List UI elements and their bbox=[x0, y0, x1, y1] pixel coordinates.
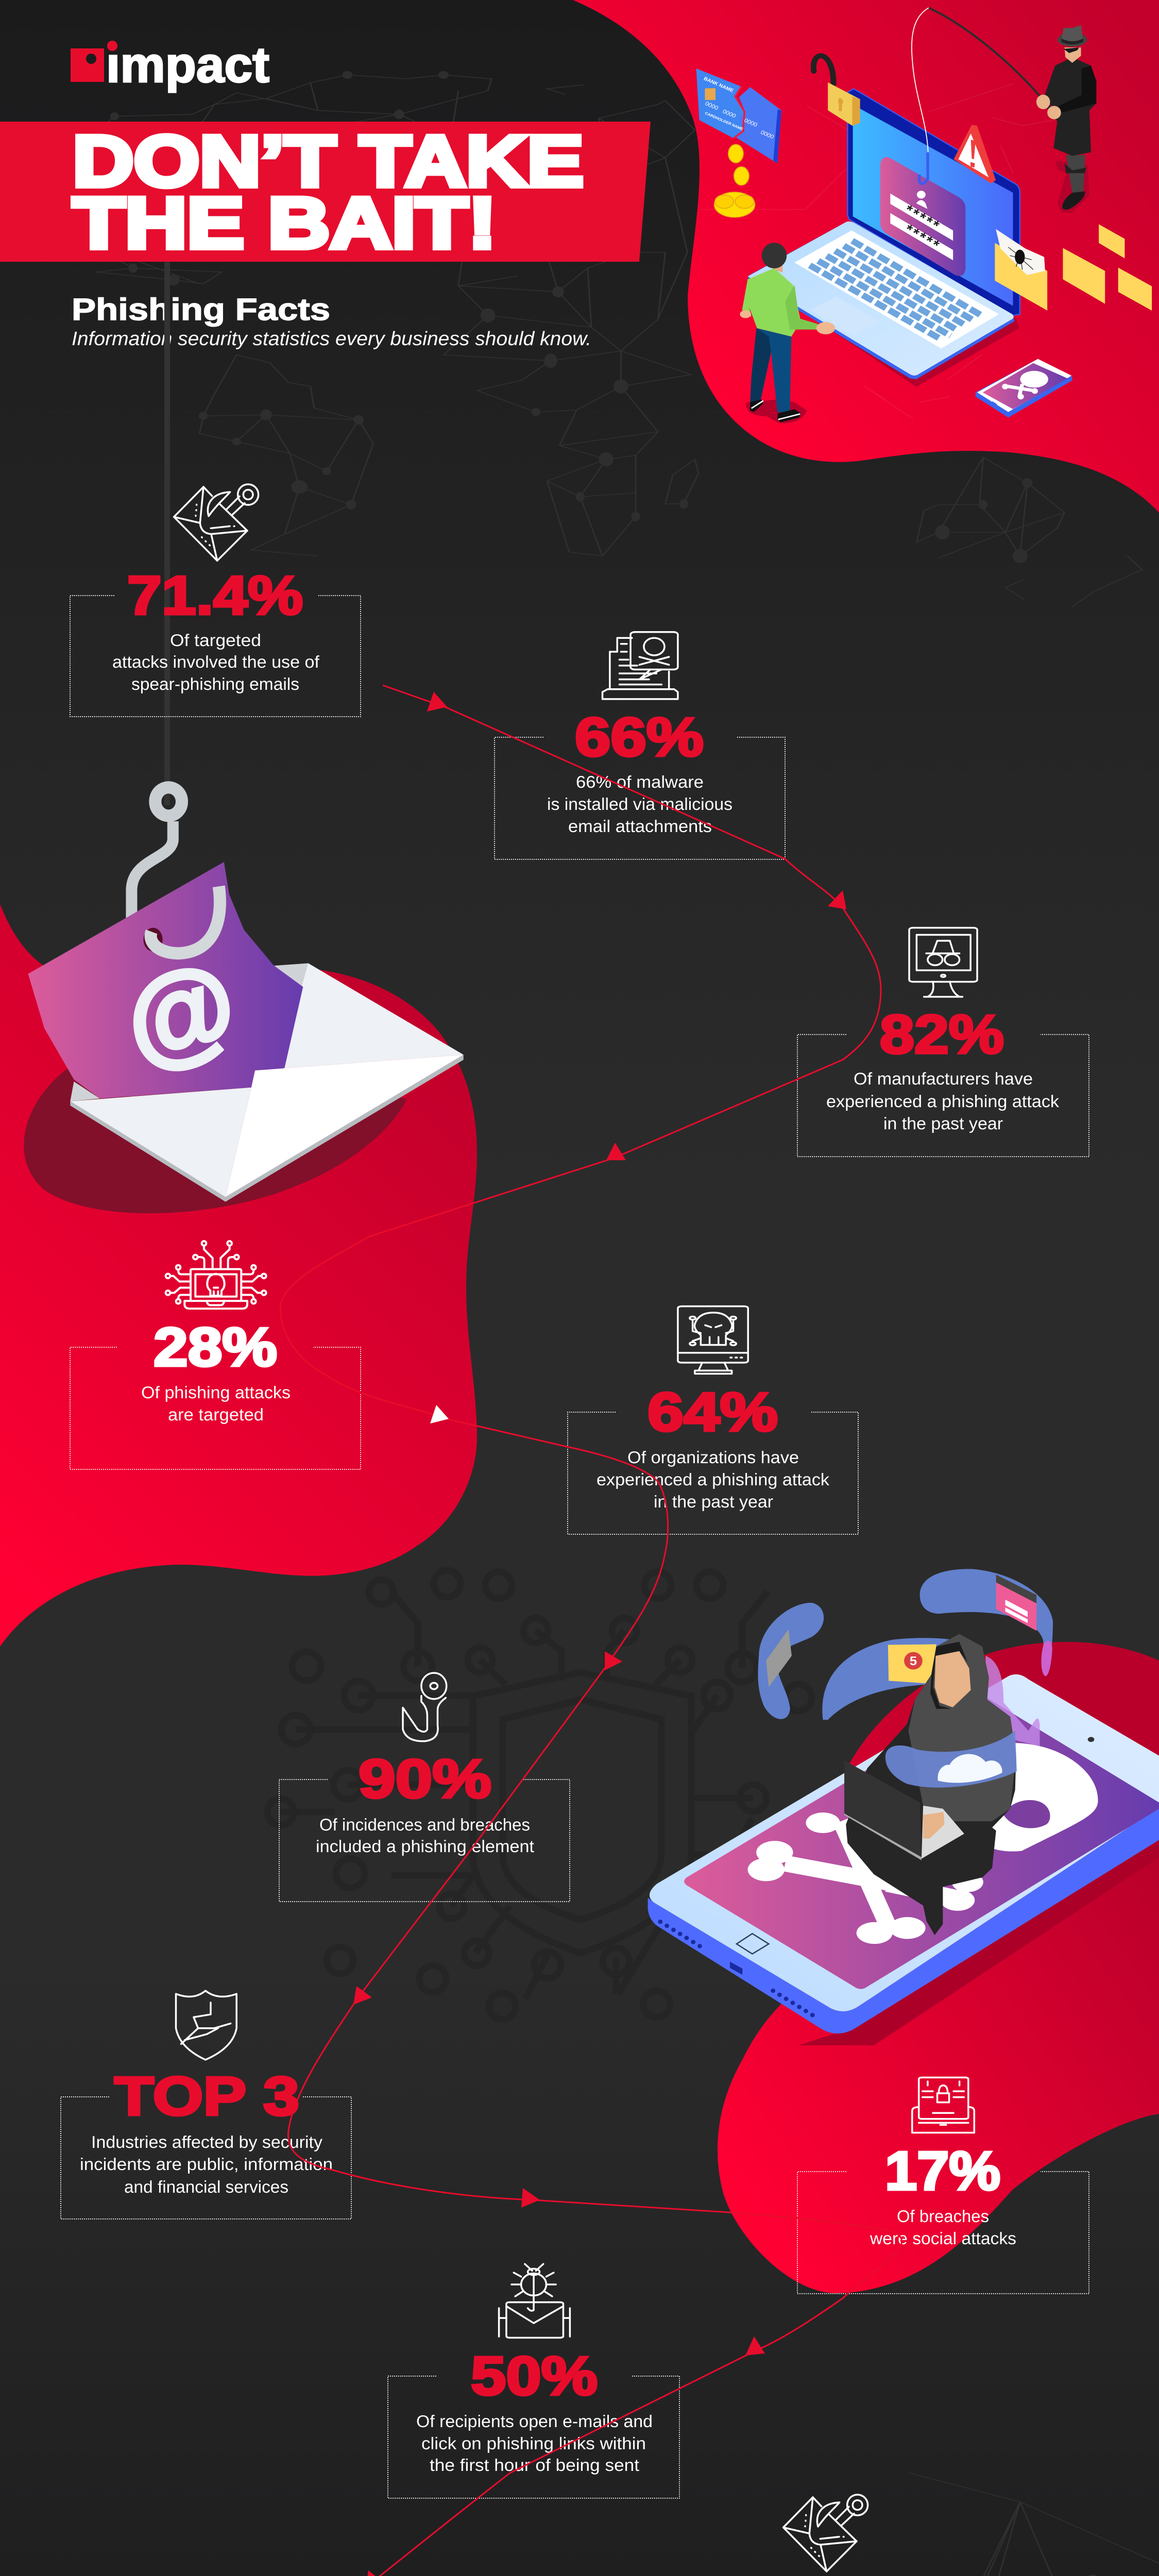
dotted box bbox=[388, 2376, 679, 2498]
description: email attachments bbox=[568, 817, 712, 836]
laptop shadow bbox=[800, 310, 1019, 387]
number: 71.4% bbox=[127, 565, 303, 626]
icon: hooked envelope bbox=[174, 484, 259, 561]
laptop bbox=[844, 1806, 964, 1859]
network pattern: bottom bbox=[301, 2473, 1159, 2576]
description: Industries affected by security bbox=[91, 2132, 323, 2151]
description: Of targeted bbox=[170, 631, 261, 650]
title banner: DON’T TAKE bbox=[73, 121, 584, 201]
man in green bbox=[746, 399, 807, 423]
panel: 28% stat bbox=[70, 1241, 361, 1469]
number: TOP 3 bbox=[114, 2066, 299, 2127]
lock bbox=[813, 56, 833, 84]
illustration: laptop phishing scene: ***** bbox=[901, 202, 944, 234]
description: Of recipients open e-mails and bbox=[416, 2412, 653, 2431]
icon: tablet lock bbox=[912, 2077, 974, 2133]
dotted box bbox=[70, 596, 361, 717]
envelope shadow bbox=[24, 1052, 406, 1213]
description bbox=[141, 1383, 291, 1424]
dotted box bbox=[70, 1347, 361, 1469]
panel: 50% stat bbox=[388, 2264, 679, 2498]
dotted box bbox=[797, 2172, 1089, 2294]
description: are targeted bbox=[168, 1405, 264, 1424]
description: Of phishing attacks bbox=[141, 1383, 291, 1402]
band with cloud bbox=[885, 1731, 1017, 1788]
panel: 17% stat bbox=[797, 2077, 1089, 2294]
keyboard bbox=[794, 230, 999, 349]
number: 17% bbox=[885, 2141, 1000, 2201]
description: were social attacks bbox=[870, 2229, 1016, 2248]
phone with skull bbox=[976, 359, 1072, 417]
description: included a phishing element bbox=[316, 1837, 534, 1856]
trackpad bbox=[810, 297, 880, 336]
number: 82% bbox=[880, 1004, 1004, 1065]
dotted box bbox=[495, 737, 785, 859]
connector arrow line bbox=[281, 685, 902, 2576]
description: incidents are public, information bbox=[80, 2155, 333, 2174]
number: 64% bbox=[647, 1382, 778, 1443]
description: spear-phishing emails bbox=[131, 674, 299, 693]
description bbox=[870, 2207, 1016, 2248]
illustration: laptop phishing scene: 0000 bbox=[721, 108, 737, 119]
description bbox=[112, 631, 320, 693]
hook ring and shank bbox=[155, 787, 182, 816]
illustration: laptop phishing scene: BANK NAME bbox=[703, 76, 735, 93]
subtitle block: Information security statistics every business should know. bbox=[72, 328, 591, 350]
description: experienced a phishing attack bbox=[826, 1092, 1060, 1111]
description: experienced a phishing attack bbox=[596, 1470, 830, 1489]
icon: bug on envelope bbox=[499, 2264, 570, 2337]
dotted box bbox=[61, 2097, 351, 2219]
at sign: @ bbox=[113, 939, 248, 1086]
envelope front bbox=[70, 1055, 464, 1202]
icon: broken shield bbox=[176, 1991, 236, 2060]
red blob: middle left bbox=[0, 904, 477, 1647]
arrowheads bbox=[353, 692, 846, 2576]
number: 28% bbox=[154, 1317, 277, 1378]
illustration: laptop phishing scene: CARDHOLDER NAME bbox=[704, 111, 744, 131]
description: and financial services bbox=[124, 2177, 288, 2196]
hacker bbox=[1056, 161, 1089, 213]
laptop base bbox=[747, 222, 1015, 379]
description: in the past year bbox=[654, 1492, 773, 1511]
illustration: hacker on phone: 5 bbox=[910, 1654, 917, 1668]
blue bubbles bbox=[758, 1603, 824, 1719]
description bbox=[826, 1069, 1060, 1133]
illustration: laptop phishing scene: 0000 bbox=[743, 117, 758, 128]
panel: 90% stat bbox=[279, 1673, 570, 1902]
dotted box bbox=[568, 1412, 858, 1534]
number: 90% bbox=[359, 1749, 491, 1809]
icon: spy monitor bbox=[909, 928, 977, 997]
yellow envelopes bbox=[995, 243, 1047, 311]
description: attacks involved the use of bbox=[112, 652, 320, 671]
title banner: THE BAIT! bbox=[73, 182, 497, 263]
login card bbox=[880, 157, 965, 276]
fishing line bbox=[164, 262, 170, 805]
circuit shield background bbox=[267, 1570, 812, 2020]
description: Of manufacturers have bbox=[854, 1069, 1033, 1088]
network pattern: top bbox=[19, 71, 1142, 607]
description: Of organizations have bbox=[627, 1448, 799, 1467]
panel: 82% stat bbox=[797, 928, 1089, 1157]
dotted box bbox=[279, 1780, 570, 1902]
panel: 66% stat bbox=[495, 632, 785, 859]
illustration: laptop phishing scene: 0000 bbox=[704, 100, 720, 111]
laptop screen bbox=[847, 89, 1020, 316]
title banner bbox=[0, 121, 651, 263]
phone face bbox=[650, 1674, 1159, 2011]
panel: 71.4% stat bbox=[70, 484, 361, 717]
panel: top 3 stat bbox=[61, 1991, 351, 2219]
description: Of incidences and breaches bbox=[319, 1815, 530, 1834]
description bbox=[547, 772, 732, 836]
subtitle block bbox=[72, 292, 591, 350]
phone side bbox=[648, 1807, 1159, 2033]
envelope back bbox=[270, 963, 308, 989]
description: 66% of malware bbox=[576, 772, 704, 791]
description: the first hour of being sent bbox=[430, 2455, 639, 2475]
panel: 1 in 1,846 stat bbox=[678, 2495, 972, 2576]
skull and bones bbox=[907, 1743, 1098, 1852]
description bbox=[596, 1448, 830, 1511]
dotted box bbox=[797, 1035, 1089, 1157]
warning sign bbox=[953, 125, 996, 183]
description bbox=[80, 2132, 333, 2196]
icon: hooked envelope bbox=[783, 2495, 868, 2571]
panel: 64% stat bbox=[568, 1306, 858, 1534]
illustration: laptop phishing scene: ***** bbox=[901, 221, 944, 254]
description bbox=[316, 1815, 534, 1856]
description bbox=[416, 2412, 653, 2475]
icon: skull monitor bbox=[678, 1306, 748, 1374]
red blob: right under phone bbox=[718, 1642, 1159, 2293]
icon: fish hook bbox=[403, 1673, 447, 1741]
hooded hacker bbox=[846, 1634, 1016, 1935]
phone screen bbox=[684, 1698, 1159, 1989]
subtitle block: Phishing Facts bbox=[72, 292, 330, 327]
description: in the past year bbox=[883, 1114, 1003, 1133]
illustration: hacker on phone bbox=[648, 1569, 1159, 2045]
red blob: top right bbox=[573, 0, 1159, 513]
impact logo: top: impact bbox=[106, 37, 269, 93]
number: 50% bbox=[471, 2346, 598, 2406]
description: is installed via malicious bbox=[547, 794, 732, 814]
bank card bbox=[696, 69, 744, 138]
coins bbox=[728, 144, 743, 163]
illustration: laptop phishing scene bbox=[696, 8, 1152, 423]
number: 66% bbox=[575, 707, 704, 768]
illustration: laptop phishing scene: 0000 bbox=[759, 129, 775, 140]
description: click on phishing links within bbox=[421, 2434, 646, 2453]
description: Of breaches bbox=[897, 2207, 989, 2226]
purple letter bbox=[28, 862, 303, 1098]
illustration: hooked email bbox=[24, 787, 464, 1213]
phone shadow bbox=[798, 1838, 1159, 2045]
fishing rod and line bbox=[929, 8, 1043, 99]
icon: circuit skull laptop bbox=[166, 1241, 266, 1309]
icon: malware laptop bbox=[603, 632, 678, 699]
